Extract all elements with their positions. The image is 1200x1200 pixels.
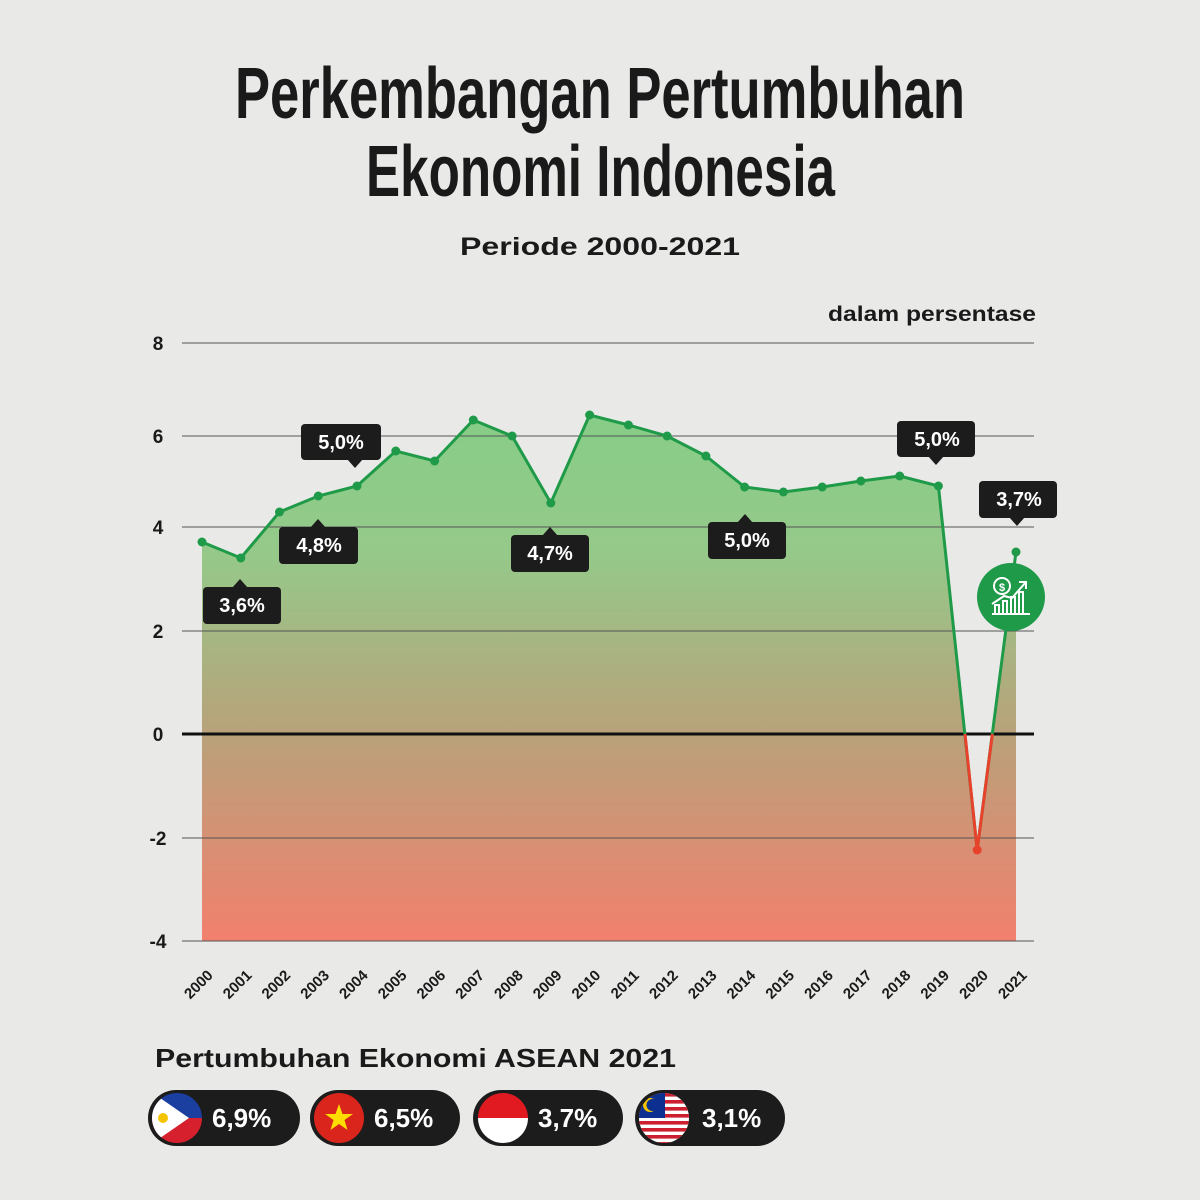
x axis years: 2000 bbox=[181, 967, 217, 1003]
x axis years bbox=[181, 967, 1031, 1003]
x axis years: 2012 bbox=[646, 967, 682, 1003]
callout: 3,7% 2021 bbox=[979, 481, 1057, 526]
x axis years: 2020 bbox=[956, 967, 992, 1003]
x axis years: 2015 bbox=[762, 967, 798, 1003]
x axis years: 2003 bbox=[297, 967, 333, 1003]
pill: Indonesia: 3,7% bbox=[538, 1103, 597, 1133]
callout: 5,0% 2019: 5,0% bbox=[914, 429, 960, 451]
x axis years: 2007 bbox=[452, 967, 488, 1003]
chart bbox=[150, 334, 1034, 1003]
x axis years: 2017 bbox=[840, 967, 876, 1003]
x axis years: 2019 bbox=[917, 967, 953, 1003]
title: Ekonomi Indonesia bbox=[366, 132, 836, 212]
callout: 5,0% 2014: 5,0% bbox=[724, 530, 770, 552]
x axis years: 2011 bbox=[608, 967, 643, 1002]
x axis years: 2018 bbox=[879, 967, 914, 1003]
callout: 5,0% 2019 bbox=[897, 421, 975, 465]
pill: Malaysia: 3,1% bbox=[702, 1103, 761, 1133]
x axis years: 2021 bbox=[995, 967, 1031, 1003]
area fill bbox=[202, 415, 1016, 941]
ASEAN heading: Pertumbuhan Ekonomi ASEAN 2021 bbox=[155, 1043, 676, 1073]
y axis labels: 6 bbox=[153, 427, 163, 448]
x axis years: 2009 bbox=[530, 967, 565, 1003]
y axis labels: 8 bbox=[153, 334, 163, 355]
title bbox=[235, 54, 965, 212]
callout: 3,6% 2001: 3,6% bbox=[219, 595, 265, 617]
unit note: dalam persentase bbox=[828, 303, 1036, 326]
y axis labels: -2 bbox=[150, 829, 166, 850]
callout: 3,7% 2021: 3,7% bbox=[996, 489, 1042, 511]
callout: 3,6% 2001 bbox=[203, 579, 281, 624]
callout: 5,0% 2014 bbox=[708, 514, 786, 559]
pill: Indonesia bbox=[473, 1090, 623, 1146]
x axis years: 2010 bbox=[569, 967, 604, 1003]
y axis labels bbox=[150, 334, 167, 953]
pill: Philippines: 6,9% bbox=[212, 1103, 271, 1133]
x axis years: 2002 bbox=[259, 967, 294, 1003]
y axis labels: 4 bbox=[153, 518, 164, 539]
y axis labels: -4 bbox=[150, 932, 167, 953]
x axis years: 2004 bbox=[336, 967, 372, 1003]
x axis years: 2013 bbox=[685, 967, 721, 1003]
x axis years: 2016 bbox=[801, 967, 837, 1003]
line bbox=[202, 415, 1016, 850]
y axis labels: 0 bbox=[153, 725, 163, 746]
callout: 4,8% 2003 bbox=[279, 519, 358, 564]
callout: 4,7% 2009: 4,7% bbox=[527, 543, 573, 565]
pill: Vietnam: 6,5% bbox=[374, 1103, 433, 1133]
icon: growth money: $ bbox=[999, 582, 1005, 594]
pill: Malaysia bbox=[635, 1090, 785, 1147]
subtitle: Periode 2000-2021 bbox=[460, 233, 740, 261]
pill: Vietnam bbox=[310, 1090, 460, 1147]
y axis labels: 2 bbox=[153, 622, 163, 643]
callout: 4,7% 2009 bbox=[511, 527, 589, 572]
x axis years: 2014 bbox=[724, 967, 760, 1003]
callout: 5,0% 2004 bbox=[301, 424, 381, 468]
x axis years: 2006 bbox=[414, 967, 449, 1003]
x axis years: 2001 bbox=[220, 967, 255, 1003]
pill: Philippines bbox=[148, 1090, 300, 1146]
x axis years: 2005 bbox=[375, 967, 410, 1003]
icon: growth money bbox=[977, 563, 1045, 631]
callout: 5,0% 2004: 5,0% bbox=[318, 432, 364, 454]
x axis years: 2008 bbox=[491, 967, 527, 1003]
callout: 4,8% 2003: 4,8% bbox=[296, 535, 342, 557]
